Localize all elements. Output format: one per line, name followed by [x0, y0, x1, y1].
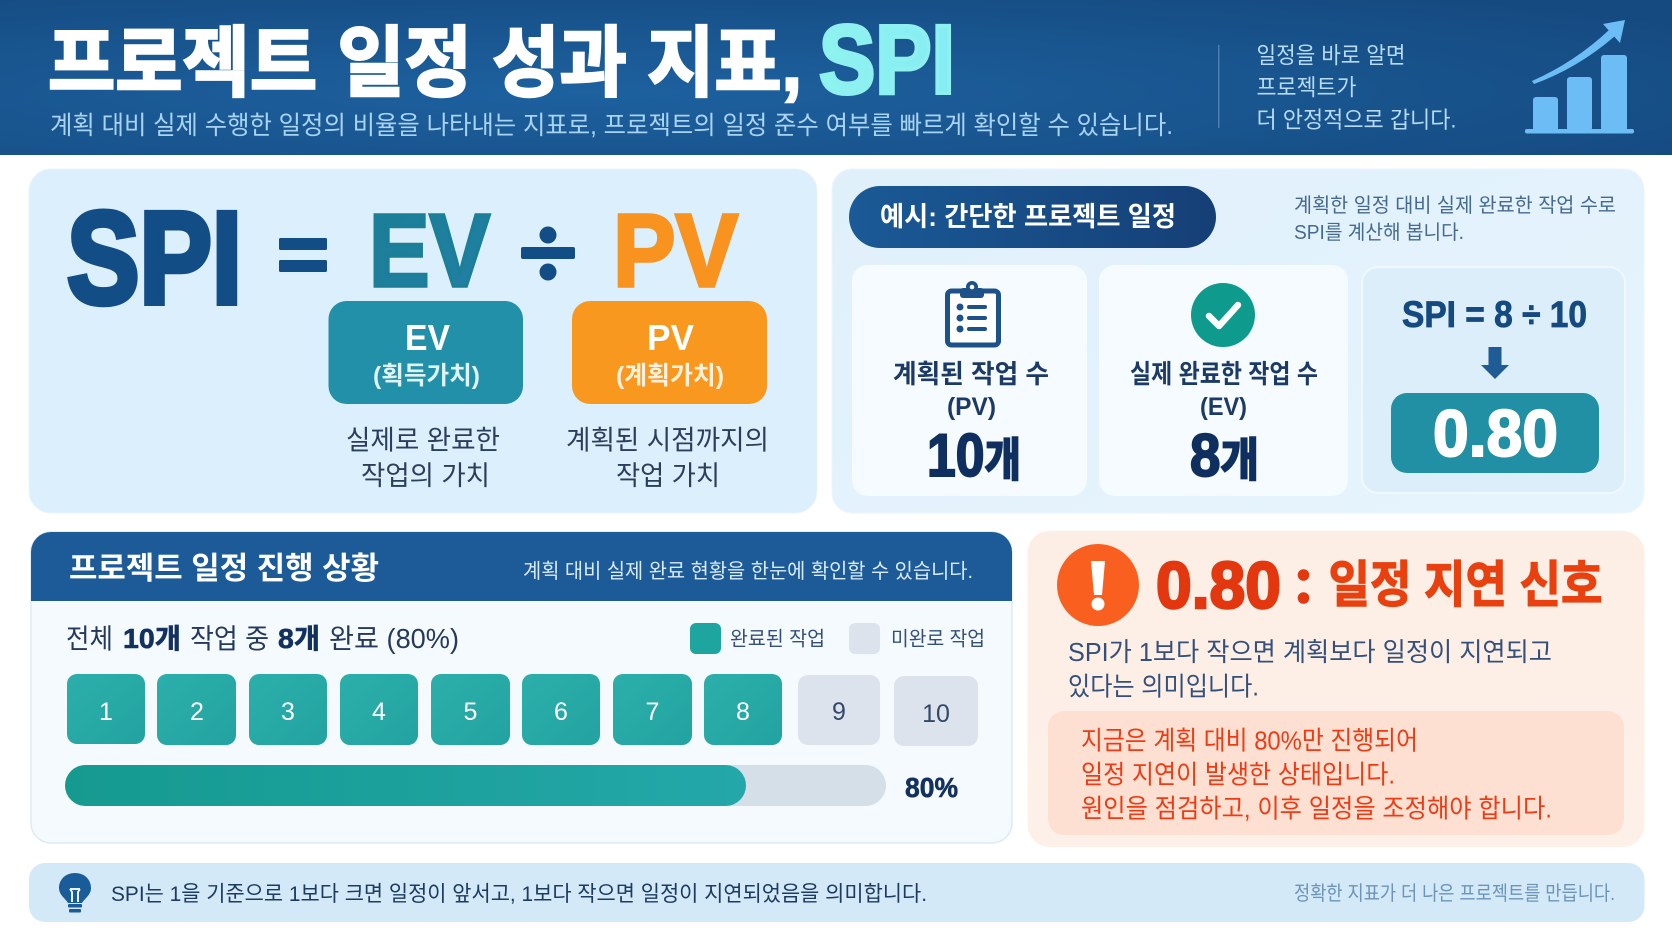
task tiles: 8	[736, 698, 750, 726]
formula	[67, 184, 738, 331]
task tiles	[67, 674, 978, 746]
legend	[690, 623, 985, 654]
panel: schedule progress	[31, 532, 1012, 843]
result value	[1391, 393, 1599, 473]
progress header	[31, 532, 1012, 601]
card: planned tasks	[852, 265, 1087, 496]
card: planned tasks: 10개	[927, 422, 1021, 489]
icon: check circle	[1191, 283, 1255, 347]
PV badge	[572, 301, 767, 404]
progress header: 계획 대비 실제 완료 현황을 한눈에 확인할 수 있습니다.	[523, 560, 973, 583]
warning callout: 지금은 계획 대비 80%만 진행되어	[1081, 726, 1418, 756]
warning explanation: SPI가 1보다 작으면 계획보다 일정이 지연되고	[1068, 637, 1552, 667]
PV description: 계획된 시점까지의	[566, 426, 769, 456]
task tiles: 2	[190, 698, 204, 726]
icon: clipboard	[948, 281, 998, 345]
formula: EV	[369, 193, 490, 308]
PV description: 작업 가치	[616, 461, 720, 491]
title: 프로젝트 일정 성과 지표,	[48, 21, 802, 107]
card: completed tasks: (EV)	[1200, 393, 1247, 421]
header side message: 일정을 바로 알면	[1256, 42, 1406, 68]
example description: 계획한 일정 대비 실제 완료한 작업 수로	[1294, 194, 1616, 217]
progress summary: 작업 중	[190, 623, 269, 654]
card: completed tasks: 8개	[1190, 422, 1259, 489]
card: planned tasks: 계획된 작업 수	[893, 359, 1049, 389]
result value: 0.80	[1433, 396, 1558, 470]
progress bar	[65, 765, 886, 806]
EV badge	[328, 301, 523, 404]
example heading pill: 예시: 간단한 프로젝트 일정	[880, 202, 1176, 232]
EV badge: (획득가치)	[373, 362, 480, 390]
icon: rising bar chart with arrow	[1525, 20, 1634, 134]
header banner	[0, 0, 1672, 155]
progress summary: 8개	[278, 623, 320, 654]
progress percent: 80%	[905, 772, 958, 803]
header side message	[1256, 42, 1456, 132]
example heading pill	[849, 186, 1216, 248]
card: completed tasks	[1099, 265, 1348, 496]
icon: light bulb	[59, 873, 91, 912]
PV badge: PV	[647, 317, 694, 358]
warning callout: 일정 지연이 발생한 상태입니다.	[1081, 760, 1395, 790]
task tiles: 1	[99, 698, 113, 726]
warning callout: 원인을 점검하고, 이후 일정을 조정해야 합니다.	[1081, 794, 1552, 824]
example description	[1294, 194, 1616, 244]
warning explanation: 있다는 의미입니다.	[1068, 672, 1259, 702]
progress summary: 완료 (80%)	[329, 623, 459, 654]
footer text: SPI는 1을 기준으로 1보다 크면 일정이 앞서고, 1보다 작으면 일정이 지연되었음을 의미합니다.	[111, 882, 927, 906]
formula: SPI	[67, 184, 242, 331]
progress summary	[66, 623, 459, 654]
warning heading: 일정 지연 신호	[1328, 557, 1602, 613]
EV description	[346, 426, 500, 491]
EV description: 작업의 가치	[361, 461, 490, 491]
EV badge: EV	[405, 317, 450, 358]
panel: example calculation	[832, 169, 1644, 513]
warning callout	[1048, 711, 1624, 835]
PV badge: (계획가치)	[616, 362, 724, 390]
card: completed tasks: 실제 완료한 작업 수	[1130, 359, 1318, 389]
task tiles: 5	[464, 698, 477, 726]
formula: PV	[613, 193, 738, 308]
title	[48, 5, 955, 114]
progress summary: 전체	[66, 623, 113, 654]
task tiles: 3	[281, 698, 295, 726]
task tiles: 6	[554, 698, 568, 726]
legend: 미완로 작업	[891, 628, 985, 650]
warning explanation	[1068, 637, 1552, 702]
example description: SPI를 계산해 봅니다.	[1294, 221, 1464, 244]
task tiles: 10	[922, 700, 950, 728]
progress header: 프로젝트 일정 진행 상황	[69, 551, 379, 586]
subtitle: 계획 대비 실제 수행한 일정의 비율을 나타내는 지표로, 프로젝트의 일정 준수 여부를 빠르게 확인할 수 있습니다.	[50, 112, 1173, 140]
PV description	[566, 426, 769, 491]
task tiles: 9	[832, 698, 846, 726]
panel: delay warning	[1028, 531, 1644, 847]
legend: 완료된 작업	[730, 628, 825, 650]
task tiles: 7	[646, 698, 659, 726]
progress summary: 10개	[123, 623, 181, 654]
header side message: 프로젝트가	[1256, 74, 1356, 100]
footer tagline: 정확한 지표가 더 나은 프로젝트를 만듭니다.	[1294, 882, 1615, 905]
title: SPI	[819, 5, 955, 114]
card: SPI result	[1362, 267, 1625, 493]
card: SPI result: SPI = 8 ÷ 10	[1402, 294, 1587, 335]
EV description: 실제로 완료한	[346, 426, 500, 456]
panel: footer note	[29, 863, 1644, 922]
header side message: 더 안정적으로 갑니다.	[1256, 106, 1456, 132]
warning heading	[1156, 548, 1602, 622]
task tiles: 4	[372, 698, 386, 726]
panel: SPI formula	[29, 169, 817, 513]
warning heading: 0.80	[1156, 548, 1281, 622]
card: planned tasks: (PV)	[947, 393, 996, 421]
arrow: down	[1481, 347, 1509, 379]
icon: exclamation	[1057, 544, 1139, 626]
